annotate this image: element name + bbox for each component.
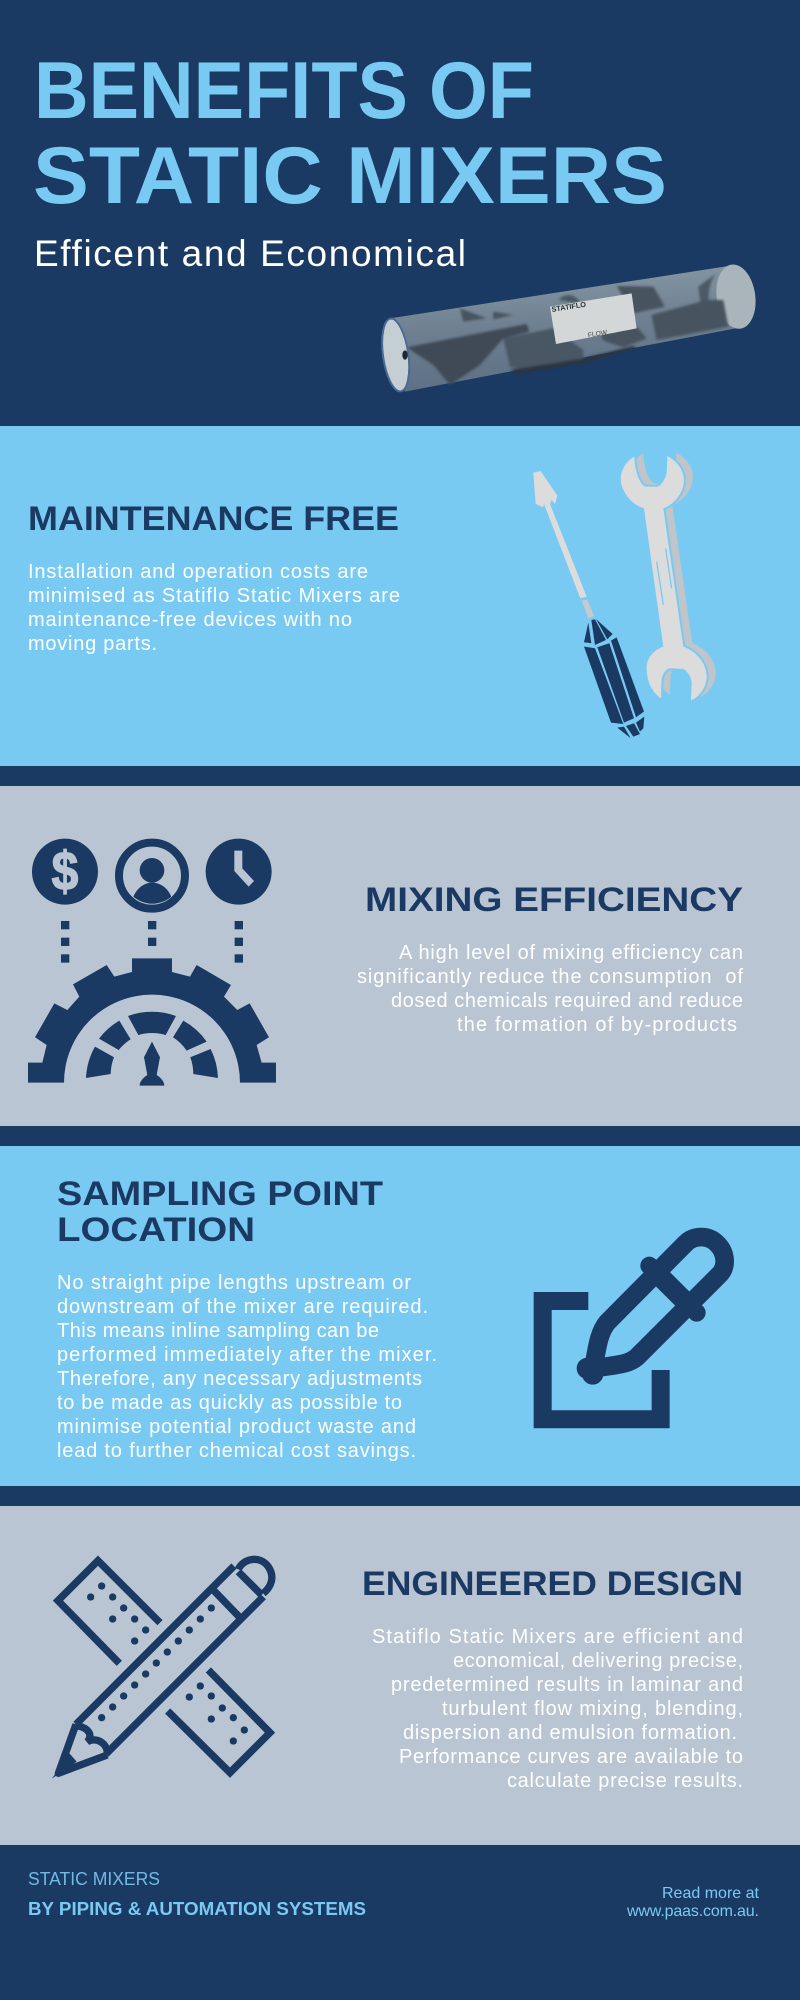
body text: to be made as quickly as possible to [57, 1392, 402, 1414]
heading [57, 1175, 383, 1249]
body text: maintenance-free devices with no [28, 609, 352, 631]
panel: engineered design [0, 1506, 800, 1845]
panel: mixing efficiency [0, 786, 800, 1126]
footer brand [28, 1869, 366, 1919]
body text [372, 1626, 743, 1792]
body text: dosed chemicals required and reduce [391, 990, 743, 1012]
image: static mixer tube: FLOW [588, 329, 608, 339]
body text [357, 942, 743, 1036]
body text: This means inline sampling can be [57, 1320, 379, 1342]
icon: screwdriver and wrench [533, 453, 716, 738]
body text [57, 1272, 437, 1462]
footer link: Read more at [662, 1885, 760, 1902]
icon: gear gauge with dollar, person and clock [28, 839, 276, 1086]
image: static mixer tube: STATIFLO [551, 300, 587, 314]
panel: maintenance free [0, 426, 800, 766]
body text: moving parts. [28, 633, 157, 655]
panel: sampling point location [0, 1146, 800, 1486]
body text: the formation of by-products [457, 1014, 737, 1036]
body text: predetermined results in laminar and [391, 1674, 743, 1696]
title: STATIC MIXERS [33, 131, 667, 221]
heading: LOCATION [57, 1211, 255, 1249]
heading: ENGINEERED DESIGN [362, 1565, 743, 1603]
footer link: www.paas.com.au. [626, 1903, 759, 1920]
heading: SAMPLING POINT [57, 1175, 383, 1213]
title: BENEFITS OF [34, 46, 534, 136]
heading: MAINTENANCE FREE [28, 500, 399, 538]
icon: crossed pencil and ruler [52, 1559, 272, 1779]
footer brand: STATIC MIXERS [28, 1869, 160, 1889]
body text: downstream of the mixer are required. [57, 1296, 428, 1318]
body text: A high level of mixing efficiency can [399, 942, 743, 964]
footer brand: BY PIPING & AUTOMATION SYSTEMS [28, 1899, 366, 1919]
icon: pipette in bracket [543, 1237, 725, 1419]
icon: gear gauge with dollar, person and clock: $ [52, 840, 78, 902]
body text: Therefore, any necessary adjustments [57, 1368, 422, 1390]
panel: hero header [0, 0, 800, 426]
heading: MIXING EFFICIENCY [365, 881, 743, 919]
body text: significantly reduce the consumption of [357, 966, 743, 988]
title [33, 46, 667, 221]
body text: lead to further chemical cost savings. [57, 1440, 416, 1462]
body text [28, 561, 400, 655]
body text: minimise potential product waste and [57, 1416, 416, 1438]
image: static mixer tube [378, 262, 760, 393]
body text: minimised as Statiflo Static Mixers are [28, 585, 400, 607]
body text: turbulent flow mixing, blending, [442, 1698, 743, 1720]
body text: economical, delivering precise, [453, 1650, 743, 1672]
body text: performed immediately after the mixer. [57, 1344, 437, 1366]
panel: footer [0, 1845, 800, 2000]
body text: Statiflo Static Mixers are efficient and [372, 1626, 743, 1648]
footer link [626, 1885, 760, 1920]
body text: Performance curves are available to [399, 1746, 743, 1768]
body text: dispersion and emulsion formation. [403, 1722, 737, 1744]
body text: No straight pipe lengths upstream or [57, 1272, 411, 1294]
body text: Installation and operation costs are [28, 561, 368, 583]
subtitle: Efficent and Economical [34, 233, 466, 274]
body text: calculate precise results. [507, 1770, 743, 1792]
